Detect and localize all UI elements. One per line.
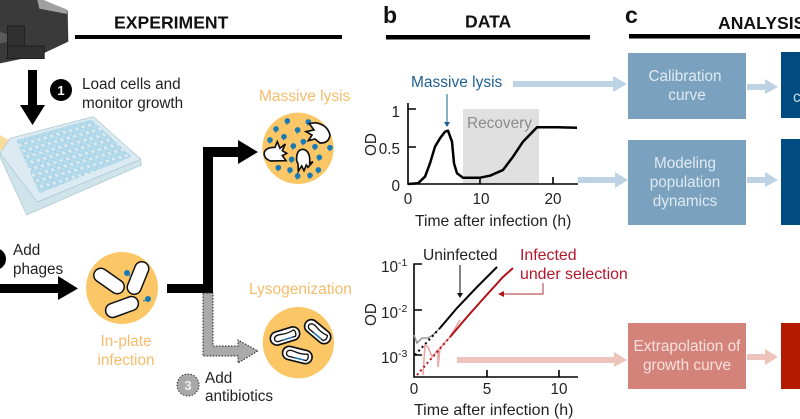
plate reader <box>0 0 68 63</box>
annotation: massive lysis <box>411 74 503 127</box>
arrow: growth to extrapolation <box>457 352 627 367</box>
chart: OD log: Time after infection (h) <box>414 402 573 419</box>
circle: massive lysis <box>262 113 334 184</box>
box: calibration curve: Calibration <box>648 68 722 85</box>
text: load cells: monitor growth <box>82 95 183 112</box>
text: add phages: Add <box>13 242 40 259</box>
step 3 badge: 3 <box>184 378 192 393</box>
chart: OD log: 0 <box>410 381 418 398</box>
box: extrapolation of growth curve <box>628 323 746 389</box>
label: in-plate infection: In-plate <box>100 333 152 350</box>
annotation: infected under selection <box>498 247 628 297</box>
step 1 badge <box>50 79 72 101</box>
chart: OD log: 5 <box>483 381 491 398</box>
chart: OD linear: 0.5 <box>379 141 400 158</box>
chart: OD linear: 0 <box>404 191 412 208</box>
box: extrapolation of growth curve: growth curve <box>643 357 731 374</box>
box: dark blue result 1 <box>781 52 800 118</box>
annotation: infected under selection: under selection <box>520 266 628 283</box>
chart: OD log: OD <box>363 303 380 326</box>
annotation: massive lysis: Massive lysis <box>411 74 503 91</box>
label: massive lysis: Massive lysis <box>259 88 351 105</box>
arrow: extrapolation to result <box>747 349 778 365</box>
panel letter c: c <box>625 2 638 28</box>
step 1 badge: 1 <box>57 83 65 98</box>
arrow: lysis to calibration <box>513 76 627 92</box>
chart: OD log: 10 <box>550 381 568 398</box>
chart: OD log: 10 <box>381 259 398 276</box>
heading: experiment: EXPERIMENT <box>114 12 229 32</box>
box: modeling population dynamics <box>628 140 746 225</box>
box: calibration curve <box>628 53 746 119</box>
annotation: infected under selection: Infected <box>520 247 577 264</box>
box: calibration curve: curve <box>668 87 706 104</box>
panel letter b: b <box>383 2 397 28</box>
chart: OD linear <box>363 103 578 230</box>
text: add antibiotics: antibiotics <box>205 388 273 405</box>
label: in-plate infection: infection <box>98 352 154 369</box>
chart: OD linear: 20 <box>544 191 562 208</box>
chart: OD linear: Recovery <box>467 115 532 132</box>
chart: OD log: 10 <box>381 350 398 367</box>
chart: OD log: -3 <box>398 348 407 360</box>
chart: OD log <box>363 257 578 419</box>
chart: OD linear: 1 <box>391 104 400 121</box>
arrow: load <box>20 70 45 125</box>
box: modeling population dynamics: Modeling <box>654 155 716 172</box>
arrow: lysogeny branch <box>203 293 258 363</box>
annotation: uninfected <box>423 247 498 298</box>
circle: lysogenization <box>263 307 334 378</box>
rule: experiment <box>75 35 342 39</box>
step 2 badge <box>0 248 6 270</box>
box: modeling population dynamics: dynamics <box>653 193 718 210</box>
circle: in-plate infection <box>86 252 158 324</box>
box: red result <box>781 323 800 389</box>
arrow: data to modeling <box>578 172 628 188</box>
text: load cells: Load cells and <box>82 76 181 93</box>
arrow: phages <box>0 276 78 300</box>
microplate <box>0 117 142 215</box>
label: lysogenization: Lysogenization <box>249 281 352 298</box>
box: extrapolation of growth curve: Extrapolation of <box>634 338 741 355</box>
rule: analysis <box>629 34 800 38</box>
box: modeling population dynamics: population <box>650 174 720 191</box>
annotation: uninfected: Uninfected <box>423 247 498 264</box>
arrow: calibration to result <box>747 79 778 94</box>
chart: OD log: -2 <box>398 303 407 315</box>
text: add phages: phages <box>13 261 64 278</box>
heading: data: DATA <box>465 12 512 32</box>
step 3 badge <box>177 374 199 396</box>
box: dark blue result 2 <box>781 139 800 225</box>
arrow: modeling to result <box>747 172 778 187</box>
arrow: lysis branch <box>167 140 258 293</box>
chart: OD linear: 0 <box>391 178 400 195</box>
chart: OD linear: OD <box>363 133 380 156</box>
chart: OD linear: 10 <box>472 191 490 208</box>
chart: OD log: 10 <box>381 305 398 322</box>
rule: data <box>386 35 590 40</box>
chart: OD linear: Time after infection (h) <box>415 213 571 230</box>
text: add antibiotics: Add <box>205 370 232 387</box>
chart: OD log: -1 <box>398 257 407 269</box>
